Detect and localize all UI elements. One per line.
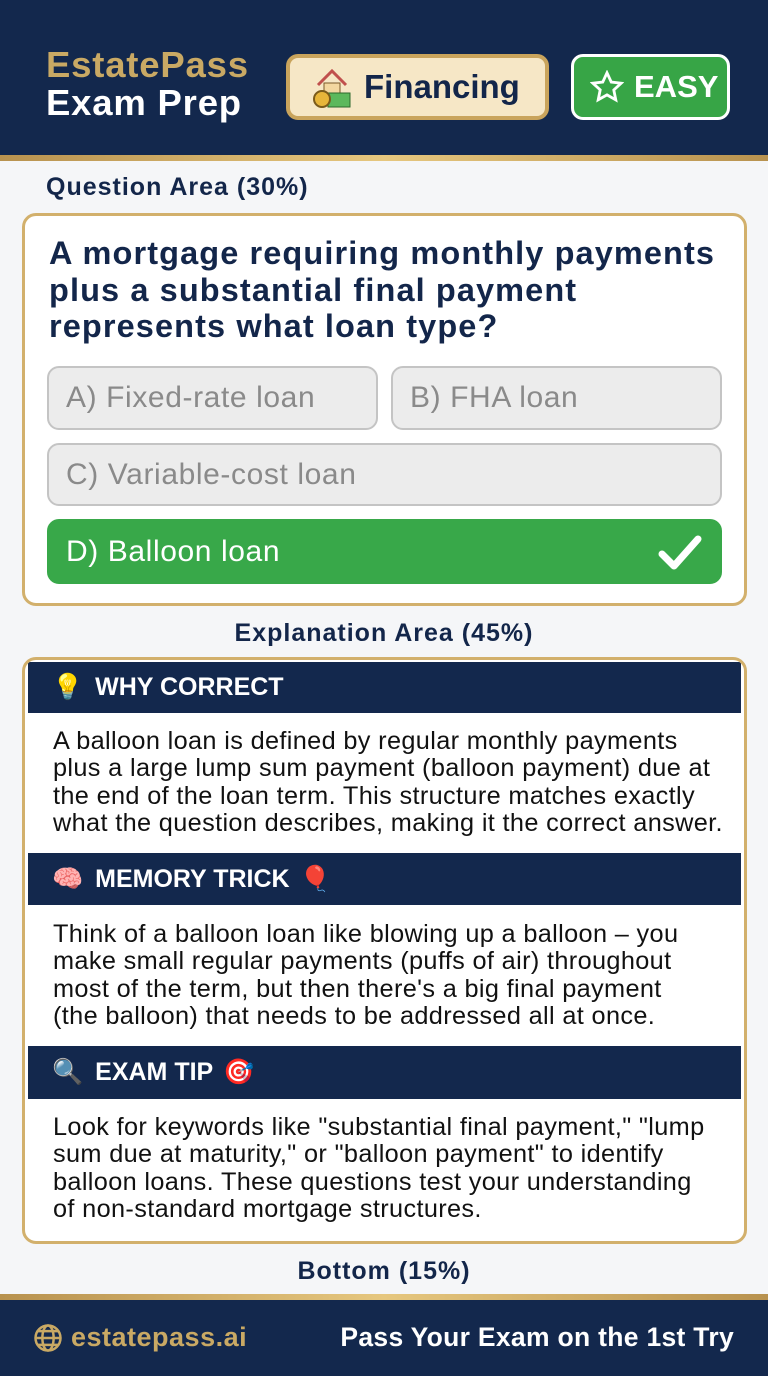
- icon: house and coins: [313, 69, 350, 108]
- option A: [47, 366, 378, 430]
- section header: exam tip: EXAM TIP: [95, 1058, 213, 1086]
- question text: represents what loan type?: [49, 308, 498, 344]
- heading: bottom: Bottom (15%): [297, 1257, 471, 1285]
- text: why correct: [53, 727, 723, 837]
- text: exam tip: [53, 1113, 704, 1223]
- section header: exam tip: [28, 1046, 741, 1099]
- text: exam tip: balloon loans. These questions test your understanding: [53, 1168, 692, 1196]
- header bar: [0, 0, 768, 155]
- footer tagline: Pass Your Exam on the 1st Try: [340, 1322, 734, 1352]
- category badge: Financing: [286, 54, 549, 120]
- logo: EstatePass: [46, 44, 249, 85]
- option C: C) Variable-cost loan: [66, 458, 356, 490]
- question text: A mortgage requiring monthly payments: [49, 235, 715, 271]
- section header: why correct: 💡: [52, 673, 83, 701]
- text: memory trick: most of the term, but then there's a big final payment: [53, 975, 662, 1003]
- option C: [47, 443, 722, 506]
- option B: B) FHA loan: [410, 381, 578, 414]
- text: memory trick: [53, 920, 678, 1030]
- question text: plus a substantial final payment: [49, 272, 577, 308]
- category badge: Financing: Financing: [364, 68, 520, 105]
- text: memory trick: make small regular payments (puffs of air) throughout: [53, 947, 671, 975]
- logo: Exam Prep: [46, 82, 242, 123]
- icon: globe: [34, 1324, 62, 1352]
- section header: memory trick: 🎈: [300, 864, 331, 892]
- section header: exam tip: 🔍: [52, 1058, 83, 1086]
- panel: question card: [22, 213, 747, 606]
- text: exam tip: of non-standard mortgage structures.: [53, 1195, 482, 1223]
- option A: A) Fixed-rate loan: [66, 381, 315, 414]
- difficulty badge: EASY: [571, 54, 730, 120]
- section header: why correct: WHY CORRECT: [95, 673, 284, 701]
- question text: [49, 235, 715, 344]
- section header: memory trick: 🧠: [52, 864, 83, 892]
- difficulty badge: EASY: EASY: [634, 69, 718, 104]
- section header: exam tip: 🎯: [223, 1058, 254, 1086]
- icon: star: [590, 70, 624, 103]
- footer website: estatepass.ai: [71, 1322, 247, 1352]
- section header: why correct: [28, 662, 741, 713]
- text: memory trick: (the balloon) that needs to be addressed all at once.: [53, 1002, 655, 1030]
- text: why correct: what the question describes, making it the correct answer.: [53, 809, 723, 837]
- logo: [46, 44, 249, 123]
- option D correct: [47, 519, 722, 584]
- panel: explanation card: [22, 657, 747, 1244]
- section header: memory trick: MEMORY TRICK: [95, 864, 290, 892]
- heading: explanation area: Explanation Area (45%): [235, 619, 533, 647]
- text: why correct: the end of the loan term. This structure matches exactly: [53, 782, 695, 810]
- text: why correct: A balloon loan is defined by regular monthly payments: [53, 727, 678, 755]
- option B: [391, 366, 722, 430]
- icon: checkmark: [658, 536, 702, 570]
- text: exam tip: sum due at maturity," or "balloon payment" to identify: [53, 1140, 664, 1168]
- heading: question area: Question Area (30%): [46, 173, 309, 201]
- footer bar: [0, 1300, 768, 1376]
- text: exam tip: Look for keywords like "substantial final payment," "lump: [53, 1113, 704, 1141]
- section header: memory trick: [28, 853, 741, 905]
- text: memory trick: Think of a balloon loan like blowing up a balloon – you: [53, 920, 678, 948]
- text: why correct: plus a large lump sum payment (balloon payment) due at: [53, 754, 710, 782]
- option D correct: D) Balloon loan: [66, 534, 280, 568]
